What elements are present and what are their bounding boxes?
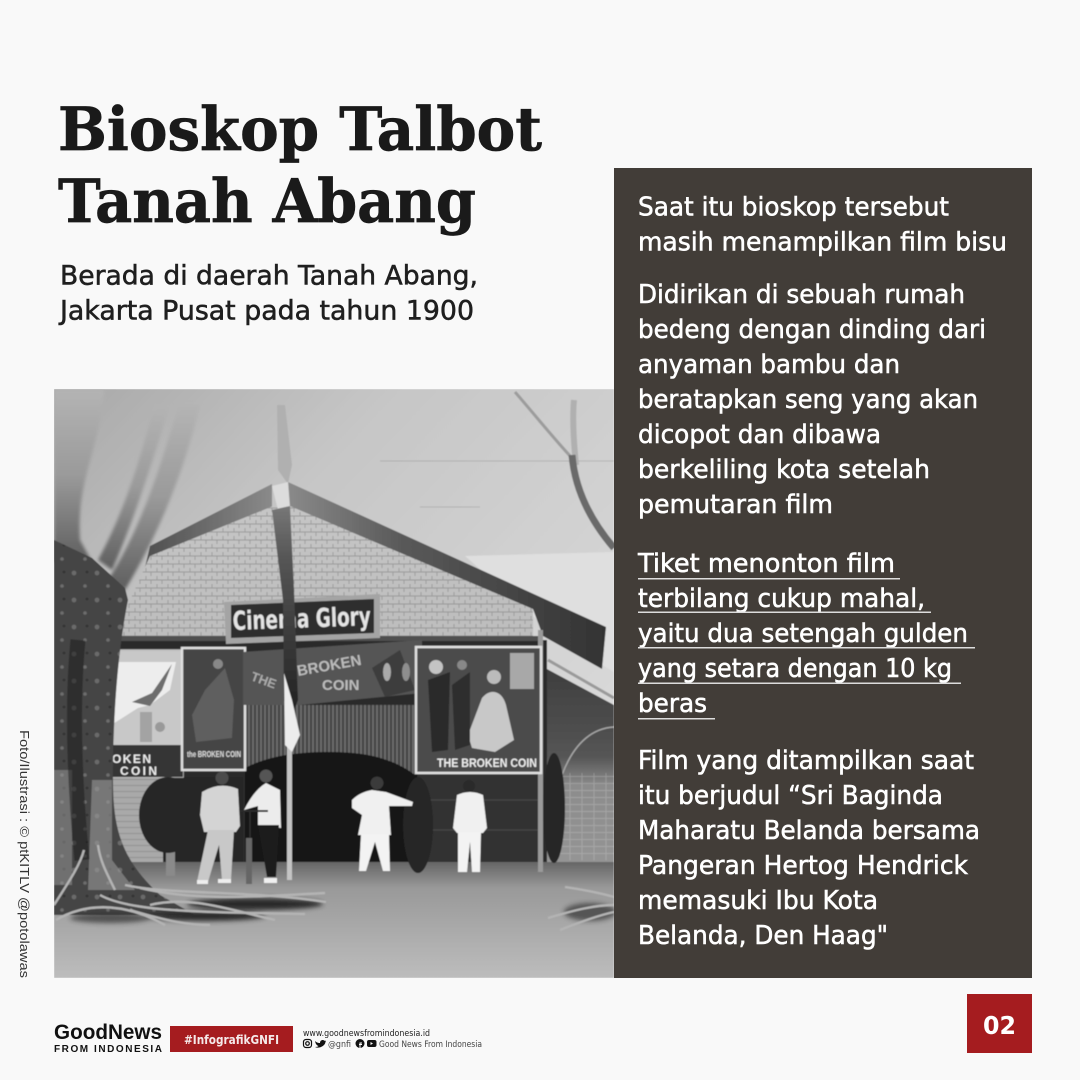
gable wall — [142, 506, 534, 636]
paragraph 3: underlined ticket price: yaitu dua setengah gulden — [638, 619, 968, 649]
icon: youtube — [367, 1040, 376, 1047]
background tree branch at right — [515, 392, 572, 458]
social links — [303, 1029, 482, 1050]
social links: @gnfi — [328, 1040, 351, 1050]
paragraph 4: Belanda, Den Haag" — [638, 921, 888, 951]
photo: Cinema Glory building: BROKEN — [296, 652, 363, 680]
left tree ghost branches — [54, 389, 200, 590]
poster left — [109, 650, 183, 777]
post right — [538, 630, 543, 872]
paragraph 2 — [638, 280, 986, 520]
photo: Cinema Glory building: OKEN — [112, 752, 151, 766]
paragraph 2: anyaman bambu dan — [638, 350, 900, 380]
right roof slope — [288, 482, 606, 669]
thatch — [245, 705, 415, 775]
facade lower — [110, 640, 547, 866]
logo: GoodNews From Indonesia — [54, 1021, 162, 1055]
title: Bioskop Talbot — [58, 95, 542, 165]
paragraph 3: underlined ticket price — [637, 549, 975, 720]
photo: Cinema Glory building: COIN — [322, 677, 360, 694]
paragraph 1 — [638, 192, 1007, 258]
photo credit: Foto/Ilustrasi : © ptKITLV @potolawas — [17, 730, 32, 979]
foliage — [139, 753, 565, 873]
photo: Cinema Glory building — [54, 389, 616, 978]
paragraph 1: masih menampilkan film bisu — [638, 228, 1007, 258]
paragraph 3: underlined ticket price: Tiket menonton film — [637, 549, 895, 579]
icon: facebook — [356, 1039, 364, 1048]
side wall — [545, 668, 614, 864]
banner broken coin — [243, 640, 422, 705]
flag and pole — [287, 740, 292, 880]
page number — [967, 994, 1032, 1053]
icon: twitter — [315, 1040, 326, 1048]
photo: Cinema Glory building: COIN — [120, 764, 157, 778]
sign Cinema Glory — [224, 594, 380, 644]
hashtag badge: #InfografikGNFI — [184, 1033, 279, 1047]
icon: instagram — [304, 1040, 312, 1048]
door opening — [245, 745, 417, 863]
logo: GoodNews From Indonesia: GoodNews — [54, 1021, 162, 1044]
man 3 — [352, 776, 413, 871]
paragraph 3: underlined ticket price: terbilang cukup mahal, — [638, 584, 925, 614]
paragraph 2: pemutaran film — [638, 490, 833, 520]
left roof slope — [145, 484, 272, 566]
ground — [54, 862, 614, 978]
poster second — [182, 648, 245, 770]
paragraph 4: Maharatu Belanda bersama — [638, 816, 980, 846]
logo: GoodNews From Indonesia: FROM INDONESIA — [54, 1044, 162, 1055]
paragraph 4: Film yang ditampilkan saat — [638, 746, 974, 776]
photo: Cinema Glory building: THE BROKEN COIN — [437, 758, 537, 770]
paragraph 4 — [638, 746, 980, 951]
paragraph 2: dicopot dan dibawa — [638, 420, 881, 450]
paragraph 3: underlined ticket price: beras — [638, 689, 707, 719]
paragraph 4: Pangeran Hertog Hendrick — [638, 851, 968, 881]
man 2 with bicycle — [240, 770, 281, 884]
paragraph 2: bedeng dengan dinding dari — [638, 315, 986, 345]
paragraph 1: Saat itu bioskop tersebut — [638, 192, 949, 222]
faint sky streaks — [380, 460, 614, 508]
man 4 — [453, 780, 487, 872]
social links: www.goodnewsfromindonesia.id — [303, 1029, 430, 1039]
social links: Good News From Indonesia — [379, 1040, 482, 1050]
hashtag badge — [170, 1026, 293, 1052]
page number: 02 — [983, 1011, 1016, 1040]
subtitle — [58, 260, 478, 326]
paragraph 2: beratapkan seng yang akan — [638, 385, 978, 415]
left boarded panel — [113, 777, 163, 865]
paragraph 2: berkeliling kota setelah — [638, 455, 930, 485]
right wooden door — [452, 796, 488, 857]
photo: Cinema Glory building: the BROKEN COIN — [187, 750, 241, 759]
paragraph 2: Didirikan di sebuah rumah — [638, 280, 965, 310]
corrugated roof right side — [465, 552, 614, 672]
poster right — [416, 647, 541, 773]
beam — [112, 636, 542, 641]
tree trunk left — [54, 540, 195, 915]
subtitle: Berada di daerah Tanah Abang, — [60, 260, 478, 292]
subtitle: Jakarta Pusat pada tahun 1900 — [58, 296, 474, 326]
photo: Cinema Glory building: THE — [249, 669, 279, 692]
paragraph 4: itu berjudul “Sri Baginda — [638, 781, 943, 811]
paragraph 3: underlined ticket price: yang setara dengan 10 kg — [638, 654, 952, 684]
title — [58, 95, 542, 237]
photo: Cinema Glory building: Cinema Glory — [232, 602, 371, 637]
panel: text block — [614, 168, 1032, 978]
tree roots — [54, 845, 614, 930]
title: Tanah Abang — [58, 167, 476, 237]
tree roots shadows — [70, 898, 616, 923]
paragraph 4: memasuki Ibu Kota — [638, 886, 878, 916]
man 1 — [197, 772, 240, 884]
post left — [165, 851, 176, 876]
